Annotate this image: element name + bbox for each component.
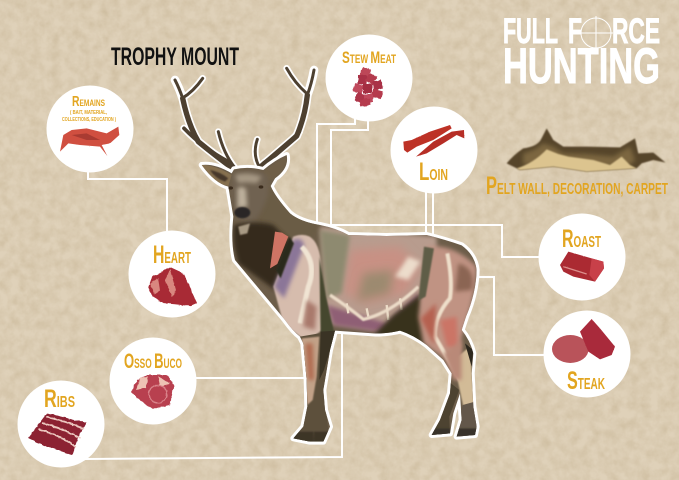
deer illustration <box>175 68 487 447</box>
icon: cubed meat <box>353 67 383 107</box>
icon: carcass remains <box>60 127 119 156</box>
panel: steak: STEAK <box>567 367 606 395</box>
logo: full force hunting: FULL <box>503 12 558 51</box>
connector lines <box>85 118 545 459</box>
icon: crosshair O <box>579 16 613 50</box>
panel: heart <box>128 230 216 318</box>
logo: full force hunting: F <box>568 12 582 51</box>
panel: remains: COLLECTIONS, EDUCATION ) <box>62 117 116 123</box>
panel: remains: REMAINS <box>72 93 105 110</box>
deer body outline <box>193 153 487 447</box>
icon: roast meat <box>560 252 604 282</box>
title: trophy mount: TROPHY MOUNT <box>111 43 239 71</box>
muscle map: rump <box>418 246 477 380</box>
panel: stew meat <box>326 34 412 122</box>
muscle map: shoulder <box>270 232 334 342</box>
icon: loin strips <box>403 125 464 157</box>
panel: steak <box>544 310 630 398</box>
muscle map: torso <box>320 227 437 347</box>
panel: roast <box>538 214 626 300</box>
panel: heart: HEART <box>153 241 191 269</box>
icon: pelt <box>507 128 666 172</box>
panel: remains: ( BAIT, MATERIAL, <box>70 110 107 116</box>
panel: osso buco <box>110 338 196 424</box>
icon: osso buco meat <box>131 375 174 409</box>
panel: ribs <box>18 380 104 468</box>
icon: heart meat <box>148 267 197 306</box>
icon: antlers <box>175 68 314 169</box>
panel: ribs: RIBS <box>44 385 75 413</box>
panel: loin <box>390 106 478 194</box>
deer head and neck <box>202 157 320 290</box>
panel: loin: LOIN <box>419 158 448 186</box>
icon: steak cuts <box>552 319 615 363</box>
panel: osso buco: OSSO BUCO <box>124 350 182 373</box>
logo: full force hunting <box>503 12 660 94</box>
panel: remains <box>46 86 134 172</box>
panel: roast: ROAST <box>562 225 601 253</box>
icon: ribs meat <box>28 413 86 455</box>
deer legs <box>292 331 478 443</box>
panel: stew meat: STEW MEAT <box>342 48 396 67</box>
